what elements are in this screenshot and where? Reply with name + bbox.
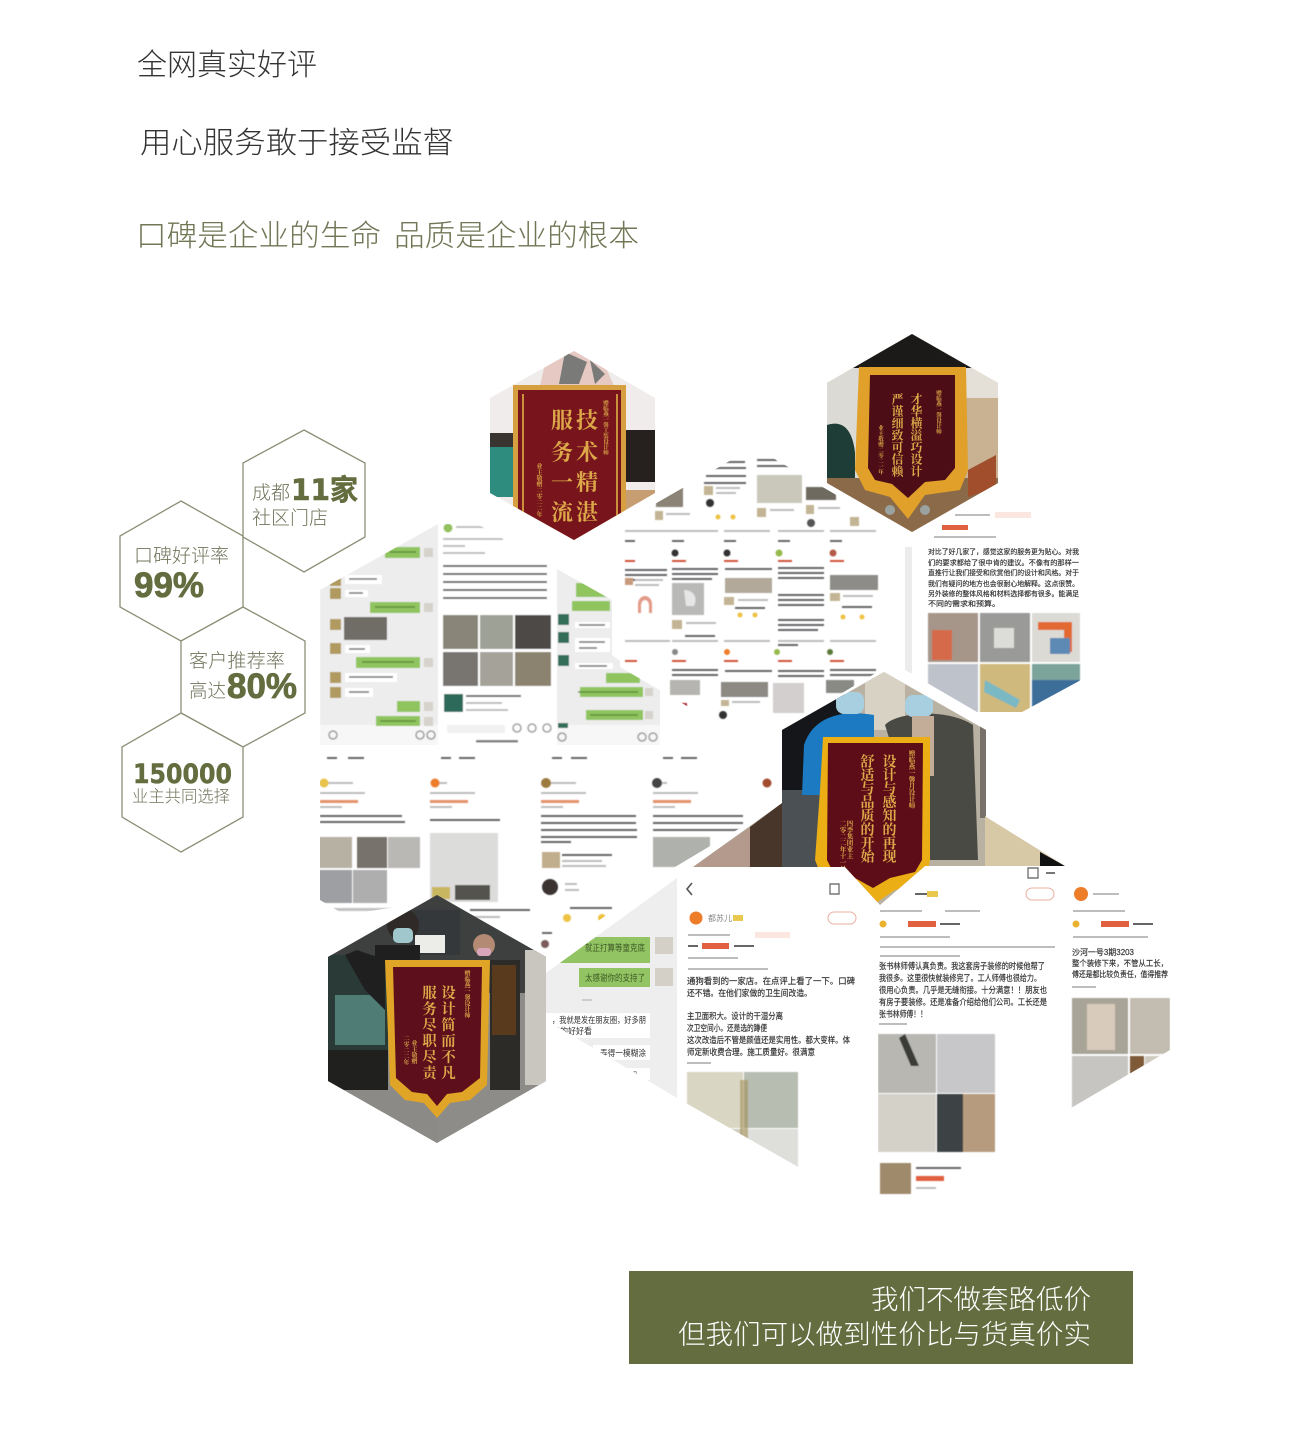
photo: pennant 技术精湛 服务一流: 精 bbox=[576, 470, 598, 495]
panel: upper right review card: 直推行让我们接受和欣赏他们的设计和风格。对于 bbox=[928, 568, 1079, 577]
photo: pennant 设计与感知的再现 舒适与品质的开始: 舒适与品质的开始 bbox=[858, 753, 874, 864]
stat: 成都11家社区门店 bbox=[243, 430, 365, 572]
panel: lower chat screenshot: 考的好好看 bbox=[552, 1026, 592, 1036]
panel: review card 2: 有房子要装修。还是准备介绍给他们公司。工长还是 bbox=[879, 997, 1048, 1007]
photo: pennant 技术精湛 服务一流 bbox=[488, 349, 658, 545]
callout banner: 性价比: 我们不做套路低价 bbox=[871, 1285, 1091, 1315]
photo: pennant 设计简而不凡 服务尽职尽责: 赠临燕一馨设计师 bbox=[463, 969, 470, 1019]
panel: upper right review card: 另外装修的整体风格和材料选择都有很多。能满足 bbox=[928, 589, 1079, 598]
photo: pennant 才华横溢巧设计 严谨细致可信赖: 才华横溢巧设计 bbox=[909, 392, 923, 478]
panel: review card 1: 都苏儿 bbox=[708, 913, 732, 923]
photo: pennant 才华横溢巧设计 严谨细致可信赖: 业主敬赠二零二一年 bbox=[877, 424, 884, 476]
panel: review card 2 bbox=[878, 868, 1055, 1194]
panel: review card 3: 傅还是都比较负责任，值得推荐 bbox=[1072, 969, 1168, 979]
stat: 口碑好评率99%: 口碑好评率 bbox=[134, 545, 229, 567]
photo: pennant 设计简而不凡 服务尽职尽责: 设计简而不凡 bbox=[439, 985, 455, 1081]
panel: lower chat screenshot: 就正打算等童克底 bbox=[585, 942, 645, 953]
panel: upper right review card: 对比了好几家了，感觉这家的服务更为贴心。对我 bbox=[928, 547, 1079, 556]
panel: review card 1: 通狗看到的一家店。在点评上看了一下。口碑 bbox=[687, 976, 856, 986]
photo: pennant 技术精湛 服务一流: 流 bbox=[551, 500, 574, 525]
photo: pennant 设计与感知的再现 舒适与品质的开始: 二零二二年十一月 bbox=[838, 820, 846, 873]
slogan: 口碑与品质 bbox=[136, 220, 639, 253]
photo: pennant 设计简而不凡 服务尽职尽责: 业主敬赠 bbox=[410, 1039, 417, 1065]
photo: pennant 才华横溢巧设计 严谨细致可信赖: 严谨细致可信赖 bbox=[890, 392, 904, 478]
panel: review card 1 bbox=[687, 883, 856, 1169]
stat: 客户推荐率高达80% bbox=[181, 607, 305, 747]
photo: pennant 技术精湛 服务一流: 湛 bbox=[576, 500, 598, 525]
panel: review card 1: 主卫面积大。设计的干湿分离 bbox=[687, 1011, 783, 1021]
subtitle: 用心服务敢于接受监督: 用心服务敢于接受监督 bbox=[140, 127, 454, 160]
panel: review cards row bbox=[319, 758, 772, 948]
stat: 150000业主共同选择 bbox=[122, 713, 243, 852]
photo: pennant 技术精湛 服务一流: 务 bbox=[551, 440, 573, 465]
photo: pennant 技术精湛 服务一流: 一 bbox=[551, 470, 573, 495]
panel: review card 3: 整个装修下来，不管从工长， bbox=[1072, 958, 1168, 968]
panel: upper right review card: 们的要求都给了很中肯的建议。不像有的那样一 bbox=[928, 558, 1079, 567]
callout banner: 性价比: 但我们可以做到性价比与货真价实 bbox=[678, 1320, 1091, 1350]
photo: pennant 技术精湛 服务一流: 业主敬赠二零二二年 bbox=[535, 462, 542, 518]
stat: 成都11家社区门店: 成都 bbox=[252, 482, 290, 504]
panel: lower chat screenshot: 美观。 bbox=[625, 1070, 643, 1080]
photo: pennant 设计简而不凡 服务尽职尽责: 二零二二年 bbox=[402, 1035, 409, 1066]
stat: 成都11家社区门店: 11家 bbox=[291, 473, 358, 507]
panel: review card 3: 沙河一号3期3203 bbox=[1072, 947, 1134, 957]
photo: pennant 设计与感知的再现 舒适与品质的开始 bbox=[690, 670, 1070, 910]
panel: review card 2: 张书林师傅认真负责。我这套房子装修的时候他帮了 bbox=[879, 961, 1045, 971]
photo: pennant 设计与感知的再现 舒适与品质的开始: 四季集团业主 bbox=[846, 820, 853, 859]
stat: 客户推荐率高达80%: 客户推荐率 bbox=[189, 650, 285, 672]
title: 全网真实好评: 全网真实好评 bbox=[137, 49, 317, 82]
photo: pennant 设计与感知的再现 舒适与品质的开始: 赠临燕一馨月设计师 bbox=[908, 749, 915, 810]
photo: pennant 设计与感知的再现 舒适与品质的开始: 设计与感知的再现 bbox=[880, 754, 896, 864]
panel: chat screenshots collage bbox=[320, 524, 660, 743]
photo: pennant 才华横溢巧设计 严谨细致可信赖 bbox=[825, 332, 1000, 538]
slogan: 口碑与品质: 口碑是企业的生命 bbox=[136, 220, 381, 253]
stat: 客户推荐率高达80%: 高达 bbox=[189, 680, 226, 702]
photo: pennant 技术精湛 服务一流: 术 bbox=[576, 440, 598, 465]
panel: review card 1: 这次改造后不管是颜值还是实用性。都大变样。体 bbox=[687, 1035, 851, 1045]
panel: lower chat screenshot: ，我就是发在朋友圈，好多朋 bbox=[552, 1015, 646, 1025]
panel: review card 2: 很用心负责。几乎是无缝衔接。十分满意！！朋友也 bbox=[879, 985, 1047, 995]
panel: lower chat screenshot: 弄得一模糊涂 bbox=[600, 1048, 646, 1058]
stat: 口碑好评率99% bbox=[120, 501, 243, 641]
stat: 客户推荐率高达80%: 80% bbox=[227, 667, 297, 706]
photo: pennant 设计简而不凡 服务尽职尽责: 服务尽职尽责 bbox=[419, 985, 436, 1081]
panel: center review collage bbox=[620, 458, 879, 720]
panel: upper right review card bbox=[905, 512, 1080, 714]
panel: upper right review card: 我们有疑问的地方也会很耐心地解释。这点很赞。 bbox=[928, 579, 1079, 588]
photo: pennant 技术精湛 服务一流: 服 bbox=[551, 408, 573, 433]
slogan: 口碑与品质: 品质是企业的根本 bbox=[394, 220, 639, 253]
panel: lower chat screenshot bbox=[545, 870, 678, 1102]
stat: 口碑好评率99%: 99% bbox=[134, 566, 204, 605]
panel: review card 3 bbox=[1072, 887, 1170, 1110]
panel: review card 2: 我很多。这里很快就装修完了。工人师傅也很给力。 bbox=[879, 973, 1041, 983]
panel: stat hexagons bbox=[120, 430, 365, 852]
panel: review card 1: 师定新收费合理。施工质量好。很满意 bbox=[687, 1047, 815, 1057]
photo: pennant 技术精湛 服务一流: 赠临燕一馨工装设计师 bbox=[602, 399, 609, 456]
panel: upper right review card: 不同的需求和预算。 bbox=[928, 599, 1000, 608]
photo: pennant 技术精湛 服务一流: 技 bbox=[576, 408, 598, 433]
stat: 成都11家社区门店: 社区门店 bbox=[252, 507, 328, 529]
panel: review card 2: 张书林师傅！！ bbox=[879, 1009, 927, 1019]
panel: lower chat screenshot: 太感谢你的支持了 bbox=[585, 972, 645, 983]
panel: review card 1: 还不错。在他们家做的卫生间改造。 bbox=[687, 988, 812, 998]
stat: 150000业主共同选择: 150000 bbox=[133, 759, 232, 790]
photo: pennant 设计简而不凡 服务尽职尽责 bbox=[326, 893, 548, 1145]
photo: pennant 才华横溢巧设计 严谨细致可信赖: 赠临燕一馨设计师 bbox=[935, 389, 942, 435]
panel: review card 1: 次卫空间小。还是选的蹲便 bbox=[687, 1023, 767, 1033]
stat: 150000业主共同选择: 业主共同选择 bbox=[132, 787, 230, 806]
callout banner: 性价比 bbox=[629, 1271, 1133, 1364]
